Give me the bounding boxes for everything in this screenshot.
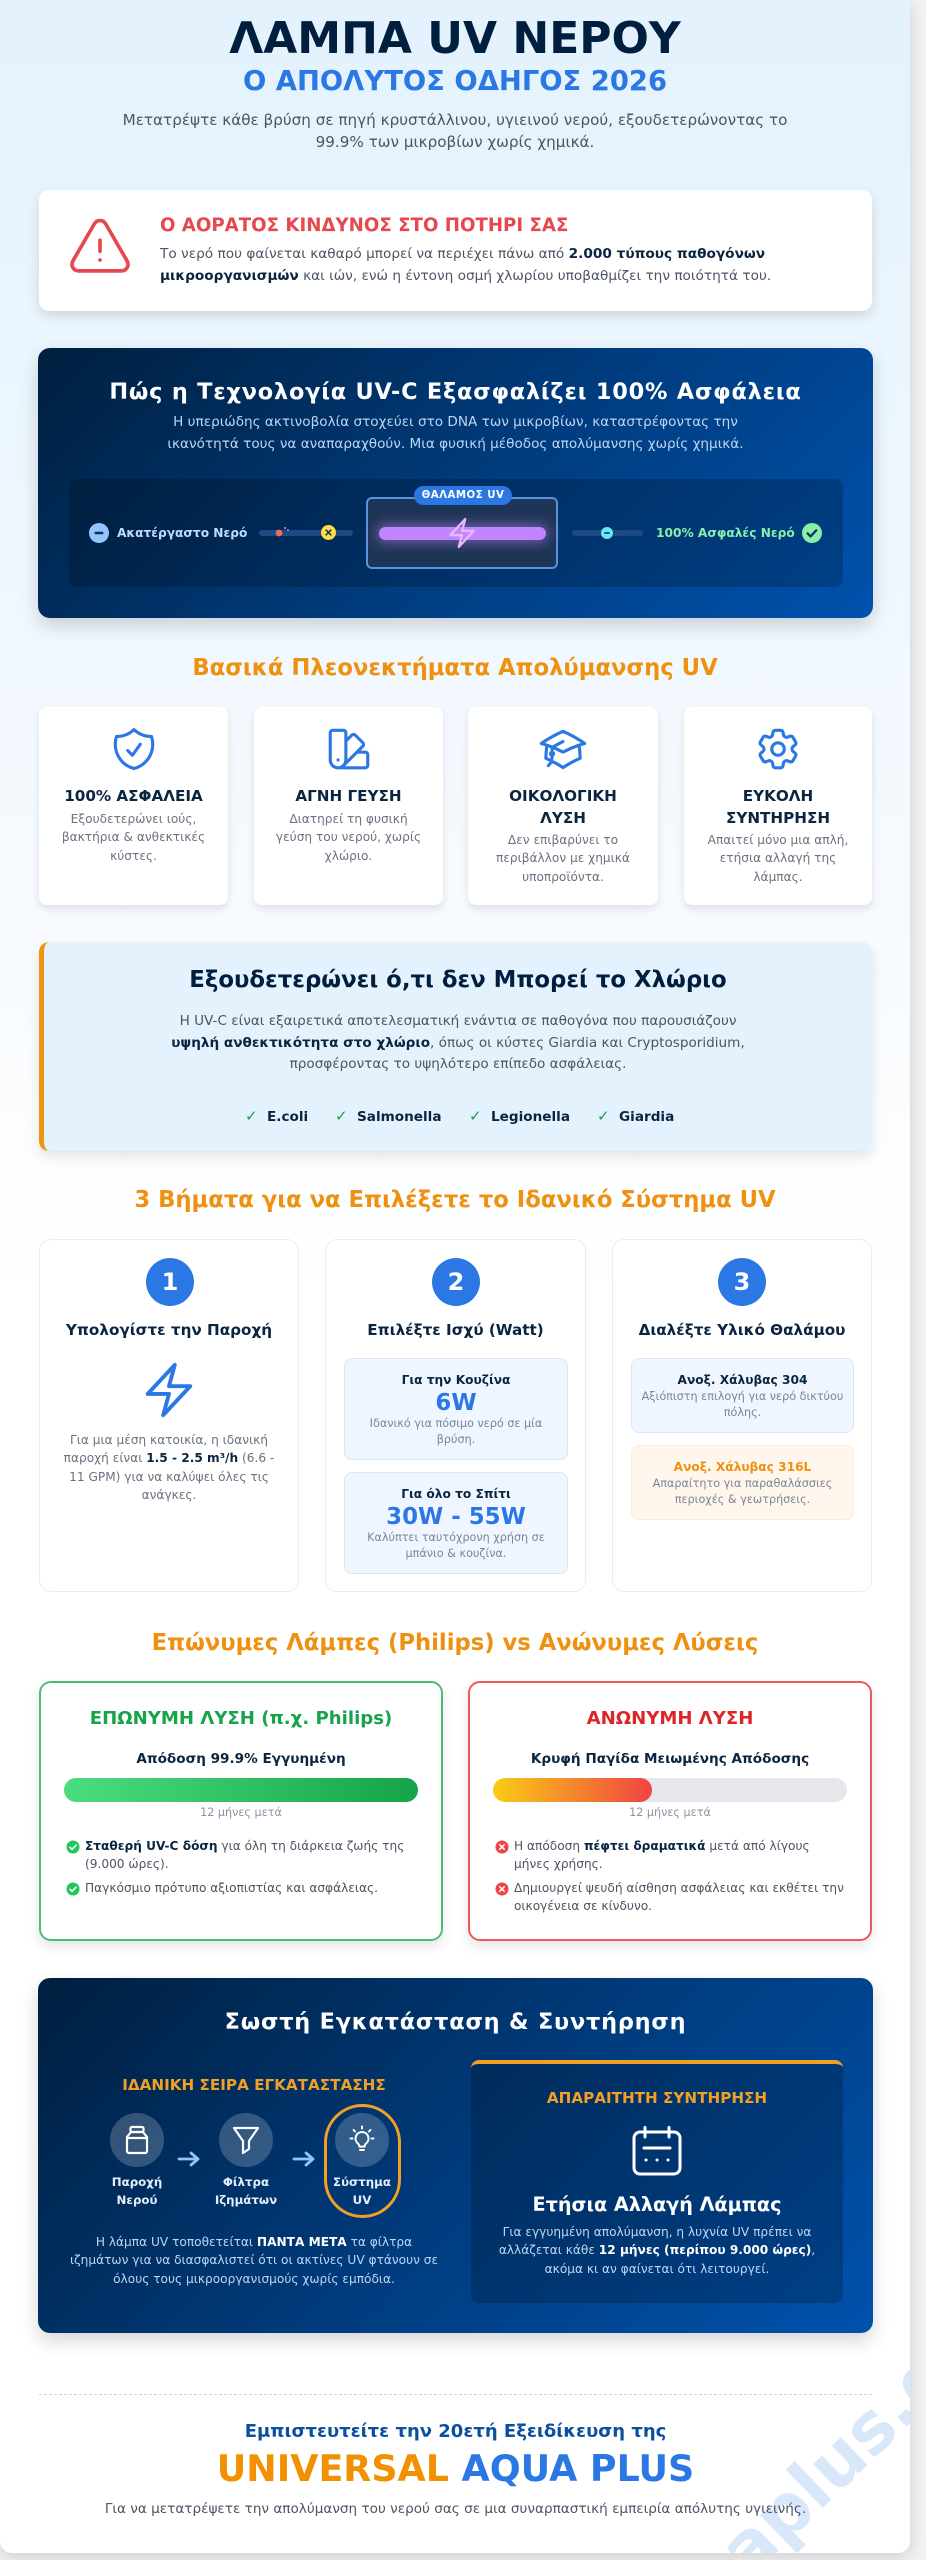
card text: ετήσια αλλαγή της — [720, 851, 836, 865]
footer — [39, 2394, 872, 2524]
step number — [718, 1258, 766, 1306]
check: Giardia: ✓ — [597, 1107, 610, 1125]
subtitle: Ο ΑΠΟΛΥΤΟΣ ΟΔΗΓΟΣ 2026 — [243, 66, 667, 97]
risk text — [514, 1839, 810, 1871]
maintenance text: αλλάζεται κάθε 12 μήνες (περίπου 9.000 ώρες), — [499, 2243, 815, 2257]
output pipe — [572, 530, 643, 536]
process diagram — [69, 479, 843, 587]
card title: ΟΙΚΟΛΟΓΙΚΗ — [509, 787, 617, 805]
alert heading: Ο ΑΟΡΑΤΟΣ ΚΙΝΔΥΝΟΣ ΣΤΟ ΠΟΤΗΡΙ ΣΑΣ — [160, 215, 568, 236]
alert text: Το νερό που φαίνεται καθαρό μπορεί να περιέχει πάνω από 2.000 τύπους παθογόνων — [160, 246, 765, 262]
card title: ΑΓΝΗ ΓΕΥΣΗ — [295, 787, 402, 805]
option: whole house — [344, 1472, 568, 1574]
panel text — [167, 414, 744, 452]
panel text: Η UV-C είναι εξαιρετικά αποτελεσματική ενάντια σε παθογόνα που παρουσιάζουν — [180, 1013, 736, 1029]
benefit text — [85, 1839, 404, 1871]
check: Giardia — [597, 1107, 674, 1125]
sequence note: Η λάμπα UV τοποθετείται ΠΑΝΤΑ ΜΕΤΑ τα φίλτρα — [96, 2235, 412, 2249]
maintenance text: ακόμα κι αν φαίνεται ότι λειτουργεί. — [545, 2262, 769, 2276]
arrow — [292, 2150, 316, 2168]
option value: 6W — [435, 1390, 477, 1416]
risk text: Η απόδοση πέφτει δραματικά μετά από λίγους — [514, 1839, 810, 1853]
panel text: ικανότητά τους να αναπαραχθούν. Μια φυσική μέθοδος απολύμανσης χωρίς χημικά. — [167, 436, 744, 452]
option: steel 304 — [631, 1358, 854, 1433]
icon: calendar — [632, 2126, 682, 2176]
heading: three steps: 3 Βήματα για να Επιλέξετε το Ιδανικό Σύστημα UV — [134, 1187, 776, 1213]
bar label: Απόδοση 99.9% Εγγυημένη — [136, 1751, 346, 1767]
option text — [370, 1417, 542, 1446]
bar fill — [493, 1778, 652, 1802]
maintenance text — [471, 2223, 843, 2278]
step number: 2 — [448, 1268, 464, 1296]
icon: shield — [114, 728, 154, 770]
option text — [367, 1531, 545, 1560]
panel: branded solution — [39, 1681, 443, 1941]
icon: funnel — [232, 2125, 260, 2155]
bar caption: 12 μήνες μετά — [200, 1806, 282, 1819]
brand name: UNIVERSAL AQUA PLUS — [217, 2447, 694, 2490]
benefit text: Σταθερή UV-C δόση για όλη τη διάρκεια ζωής της — [85, 1839, 404, 1853]
check: Giardia: Giardia — [619, 1109, 674, 1125]
icon: gear — [758, 728, 798, 770]
alert panel — [39, 190, 872, 311]
step text: Για μια μέση κατοικία, η ιδανική — [70, 1433, 268, 1447]
card title: ΕΥΚΟΛΗ — [743, 787, 813, 805]
check: E.coli: E.coli — [267, 1109, 308, 1125]
option: kitchen — [344, 1358, 568, 1460]
panel title: ΑΝΩΝΥΜΗ ΛΥΣΗ — [587, 1708, 753, 1729]
check: Legionella: Legionella — [491, 1109, 570, 1125]
step number: 3 — [734, 1268, 750, 1296]
check: Salmonella: ✓ — [335, 1107, 348, 1125]
icon: check — [66, 1882, 80, 1896]
contaminant particles — [276, 527, 289, 536]
step text: παροχή είναι 1.5 - 2.5 m³/h (6.6 - — [64, 1451, 274, 1465]
risk text: μήνες χρήσης. — [514, 1857, 603, 1871]
card title: ΛΥΣΗ — [540, 809, 586, 827]
step title: Υπολογίστε την Παροχή — [66, 1321, 272, 1339]
heading: benefits: Βασικά Πλεονεκτήματα Απολύμανσης UV — [192, 655, 718, 681]
label: water supply — [110, 2173, 164, 2210]
alert text — [160, 246, 771, 284]
option text — [642, 1390, 843, 1419]
label: water supply: Παροχή — [112, 2175, 162, 2189]
panel text: Η υπεριώδης ακτινοβολία στοχεύει στο DNA των μικροβίων, καταστρέφοντας την — [173, 414, 738, 430]
option title: Ανοξ. Χάλυβας 316L — [674, 1460, 811, 1474]
input pipe — [259, 530, 353, 536]
sequence note — [38, 2233, 470, 2288]
panel heading: Σωστή Εγκατάσταση & Συντήρηση — [225, 2009, 686, 2035]
step: filters — [219, 2113, 273, 2167]
icon: raw water — [89, 523, 109, 543]
step title: Διαλέξτε Υλικό Θαλάμου — [639, 1321, 845, 1339]
intro text — [123, 111, 787, 151]
icon: yellow microbe — [321, 525, 336, 540]
panel heading: Εξουδετερώνει ό,τι δεν Μπορεί το Χλώριο — [189, 967, 727, 993]
icon: bulb — [348, 2125, 376, 2155]
benefit text: Παγκόσμιο πρότυπο αξιοπιστίας και ασφάλειας. — [85, 1881, 378, 1895]
panel: generic solution — [468, 1681, 872, 1941]
intro text: 99.9% των μικροβίων χωρίς χημικά. — [316, 133, 594, 151]
panel: how UV-C works — [38, 348, 873, 618]
sequence heading: ΙΔΑΝΙΚΗ ΣΕΙΡΑ ΕΓΚΑΤΑΣΤΑΣΗΣ — [122, 2076, 386, 2094]
option text: Καλύπτει ταυτόχρονη χρήση σε — [367, 1531, 545, 1544]
step text — [64, 1433, 274, 1502]
risk text: Δημιουργεί ψευδή αίσθηση ασφάλειας και εκθέτει την — [514, 1881, 844, 1895]
label: filters: Ιζημάτων — [215, 2193, 277, 2207]
icon: bolt — [146, 1362, 192, 1418]
card text: Απαιτεί μόνο μια απλή, — [708, 833, 848, 847]
card text: Διατηρεί τη φυσική — [289, 812, 408, 826]
check: Legionella: ✓ — [469, 1107, 482, 1125]
intro text: Μετατρέψτε κάθε βρύση σε πηγή κρυστάλλινου, υγιεινού νερού, εξουδετερώνοντας το — [123, 111, 787, 129]
card title — [509, 787, 617, 827]
title: ΛΑΜΠΑ UV ΝΕΡΟΥ — [229, 13, 681, 64]
panel text: υψηλή ανθεκτικότητα στο χλώριο, όπως οι κύστες Giardia και Cryptosporidium, — [171, 1035, 745, 1051]
card text: Εξουδετερώνει ιούς, — [71, 812, 196, 826]
maintenance card — [471, 2060, 843, 2303]
option text — [652, 1477, 832, 1506]
check: Legionella — [469, 1107, 570, 1125]
UV chamber — [366, 497, 558, 569]
chamber label — [414, 486, 512, 505]
risk text: οικογένεια σε κίνδυνο. — [514, 1899, 652, 1913]
card title — [726, 787, 830, 827]
option text: Απαραίτητο για παραθαλάσσιες — [653, 1477, 832, 1490]
card title: 100% ΑΣΦΑΛΕΙΑ — [64, 787, 203, 805]
card text — [708, 833, 848, 884]
card text: λάμπας. — [753, 870, 803, 884]
footer tagline: Για να μετατρέψετε την απολύμανση του νερού σας σε μια συναρπαστική εμπειρία απόλυτης υγιεινής. — [105, 2501, 806, 2517]
card text: Δεν επιβαρύνει το — [508, 833, 618, 847]
panel text: προσφέροντας το υψηλότερο επίπεδο ασφάλειας. — [290, 1056, 626, 1072]
alert text: μικροοργανισμών και ιών, ενώ η έντονη οσμή χλωρίου υποβαθμίζει την ποιότητά του. — [160, 268, 771, 284]
chamber label: ΘΑΛΑΜΟΣ UV — [422, 490, 504, 501]
panel: chlorine comparison — [39, 942, 872, 1151]
pathogen list — [245, 1107, 674, 1125]
icon: clean particle — [601, 527, 613, 539]
card text — [496, 833, 630, 884]
highlight ring — [324, 2104, 401, 2218]
icon: bolt — [449, 518, 475, 548]
panel title: ΕΠΩΝΥΜΗ ΛΥΣΗ (π.χ. Philips) — [90, 1708, 392, 1729]
step 2 — [325, 1239, 586, 1592]
heading: branded vs generic: Επώνυμες Λάμπες (Philips) vs Ανώνυμες Λύσεις — [152, 1630, 758, 1656]
step 1 — [39, 1239, 299, 1592]
step title: Επιλέξτε Ισχύ (Watt) — [367, 1321, 544, 1339]
sequence note: ιζημάτων για να διασφαλιστεί ότι οι ακτίνες UV φτάνουν σε — [70, 2253, 438, 2267]
benefit card 1 — [39, 707, 228, 905]
benefit card 4 — [684, 707, 872, 905]
icon: cross — [496, 1882, 508, 1896]
option: steel 316L — [631, 1445, 854, 1520]
card text: βακτήρια & ανθεκτικές — [62, 830, 205, 844]
option title: Ανοξ. Χάλυβας 304 — [678, 1373, 807, 1387]
maintenance title: Ετήσια Αλλαγή Λάμπας — [533, 2193, 781, 2216]
maintenance text: Για εγγυημένη απολύμανση, η λυχνία UV πρέπει να — [503, 2225, 811, 2239]
performance bar — [493, 1778, 847, 1802]
benefit card 2 — [254, 707, 443, 905]
step: water supply — [110, 2113, 164, 2167]
step number — [146, 1258, 194, 1306]
step 3 — [612, 1239, 872, 1592]
icon: check — [66, 1840, 80, 1854]
icon: warning triangle — [70, 218, 130, 273]
panel text — [171, 1013, 745, 1072]
label: filters — [206, 2173, 286, 2210]
option title: Για την Κουζίνα — [402, 1373, 510, 1387]
check: Salmonella: Salmonella — [357, 1109, 442, 1125]
card text: υποπροϊόντα. — [522, 870, 604, 884]
step text: ανάγκες. — [142, 1488, 196, 1502]
step text: 11 GPM) για να καλύψει όλες τις — [69, 1470, 269, 1484]
benefit card 3 — [468, 707, 658, 905]
label: raw water: Ακατέργαστο Νερό — [117, 526, 247, 540]
step number: 1 — [162, 1268, 178, 1296]
UV lamp — [379, 527, 546, 540]
bar caption: 12 μήνες μετά — [629, 1806, 711, 1819]
step: UV system — [335, 2113, 389, 2167]
option text: Ιδανικό για πόσιμο νερό σε μία — [370, 1417, 542, 1430]
icon: water tank — [126, 2126, 148, 2154]
panel heading: Πώς η Τεχνολογία UV-C Εξασφαλίζει 100% Ασφάλεια — [109, 379, 802, 405]
bar label: Κρυφή Παγίδα Μειωμένης Απόδοσης — [531, 1751, 809, 1767]
icon: swatch — [328, 728, 370, 770]
step number — [432, 1258, 480, 1306]
option text: μπάνιο & κουζίνα. — [406, 1547, 506, 1560]
panel: installation and maintenance — [38, 1978, 873, 2333]
card text — [62, 812, 205, 863]
card text: χλώριο. — [325, 849, 372, 863]
performance bar — [64, 1778, 418, 1802]
icon: safe check — [802, 523, 822, 543]
arrow — [177, 2150, 201, 2168]
card text: κύστες. — [110, 849, 157, 863]
label: water supply: Νερού — [117, 2193, 157, 2207]
option title: Για όλο το Σπίτι — [401, 1487, 511, 1501]
label: UV system — [322, 2173, 402, 2210]
card text — [276, 812, 421, 863]
check: E.coli — [245, 1107, 308, 1125]
benefit text: (9.000 ώρες). — [85, 1857, 169, 1871]
card title: ΣΥΝΤΗΡΗΣΗ — [726, 809, 830, 827]
footer lead: Εμπιστευτείτε την 20ετή Εξειδίκευση της — [245, 2421, 666, 2442]
option text: πόλης. — [724, 1406, 761, 1419]
label: filters: Φίλτρα — [223, 2175, 269, 2189]
risk text — [514, 1881, 844, 1913]
icon: cross — [496, 1840, 508, 1854]
icon: cap — [540, 730, 586, 770]
label: UV system: Σύστημα — [333, 2175, 391, 2189]
option value: 30W - 55W — [386, 1504, 526, 1530]
label: safe water: 100% Ασφαλές Νερό — [656, 526, 795, 540]
option text: περιοχές & γεωτρήσεις. — [675, 1493, 810, 1506]
sequence note: όλους τους μικροοργανισμούς χωρίς εμπόδια. — [113, 2272, 395, 2286]
option text: Αξιόπιστη επιλογή για νερό δικτύου — [642, 1390, 843, 1403]
check: E.coli: ✓ — [245, 1107, 258, 1125]
maintenance heading: ΑΠΑΡΑΙΤΗΤΗ ΣΥΝΤΗΡΗΣΗ — [547, 2089, 767, 2107]
label: UV system: UV — [353, 2193, 371, 2207]
card text: γεύση του νερού, χωρίς — [276, 830, 421, 844]
card text: περιβάλλον με χημικά — [496, 851, 630, 865]
option text: βρύση. — [437, 1433, 475, 1446]
